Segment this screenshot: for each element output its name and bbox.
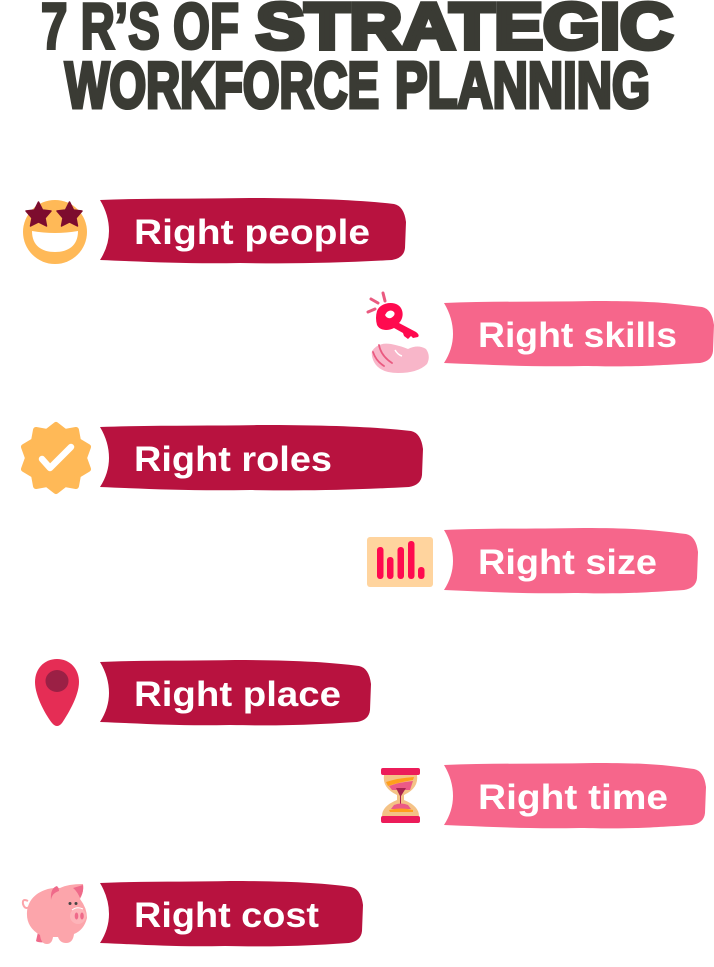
icon: key over hand <box>368 293 429 373</box>
banner: right people: Right people <box>134 213 370 252</box>
icon: bar chart <box>367 537 433 587</box>
banner: right skills: Right skills <box>478 316 677 355</box>
title <box>41 0 673 122</box>
icon: star-eyed face <box>23 200 87 264</box>
title: WORKFORCE <box>65 48 379 122</box>
banner: right cost: Right cost <box>134 896 319 935</box>
banner: right time <box>444 763 706 828</box>
banner: right skills <box>444 301 714 366</box>
banner: right roles: Right roles <box>134 440 332 479</box>
banner: right people <box>100 198 406 263</box>
banner: right size: Right size <box>478 543 657 582</box>
icon: hourglass <box>381 768 420 823</box>
icon: piggy bank <box>23 884 87 944</box>
banner: right roles <box>100 425 423 490</box>
banner: right cost <box>100 881 363 946</box>
banner: right place: Right place <box>134 675 341 714</box>
icon: check badge <box>24 425 88 491</box>
banner: right size <box>444 528 698 593</box>
icon: map pin <box>35 659 79 726</box>
banner: right place <box>100 660 371 725</box>
banner: right time: Right time <box>478 778 668 817</box>
